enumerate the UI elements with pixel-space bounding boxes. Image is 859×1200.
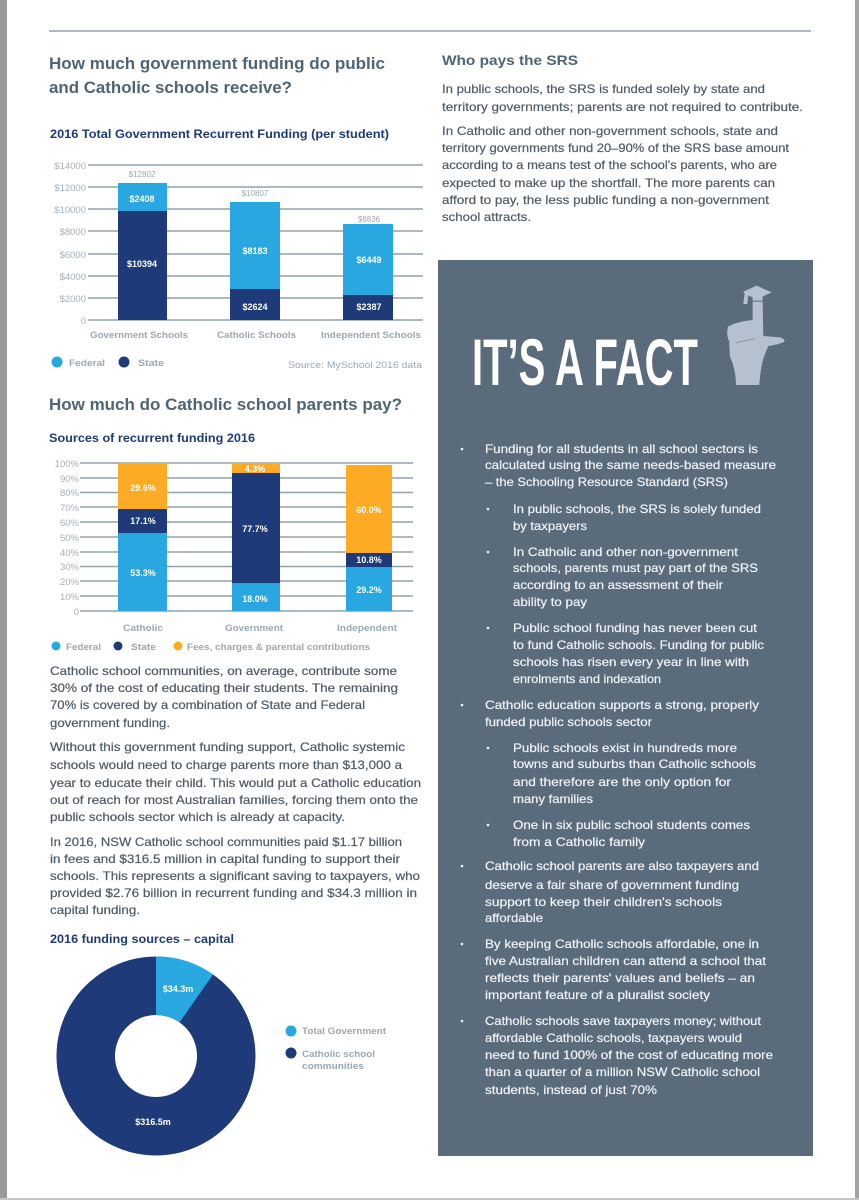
bar: independent schools: $8836: [358, 215, 381, 224]
bullet: supports public sector: funded public schools sector: [485, 715, 652, 729]
bullet: parents are taxpayers: Catholic school parents are also taxpayers and: [485, 859, 759, 873]
bar: catholic: 29.6%: [130, 483, 156, 493]
stacked bar chart: sources of recurrent funding: 30%: [60, 562, 80, 573]
sub-bullet: public schools SRS: by taxpayers: [513, 519, 587, 533]
heading: government funding: [49, 54, 385, 97]
bullet: one in five: By keeping Catholic schools affordable, one in: [485, 937, 759, 951]
text block: public schools SRS: [442, 82, 803, 114]
stacked bar chart: sources of recurrent funding: 100%: [55, 459, 80, 470]
text block: without government funding: schools would need to charge parents more than $13,000 a: [50, 758, 402, 772]
chart title: sources of recurrent funding: Sources of recurrent funding 2016: [49, 431, 255, 445]
donut chart: capital funding: [56, 956, 255, 1156]
text block: without government funding: Without this government funding support, Catholic systemic: [50, 740, 405, 754]
text block: without government funding: public schools sector which is already at capacity.: [50, 810, 345, 824]
stacked bar chart: sources of recurrent funding: 20%: [60, 577, 80, 588]
text block: public schools SRS: In public schools, the SRS is funded solely by state and: [442, 82, 765, 96]
text block: non-government schools SRS: expected to make up the shortfall. The more parents can: [442, 176, 775, 190]
sub-bullet: parents pay part: In Catholic and other non-government: [513, 545, 739, 559]
stacked bar chart: sources of recurrent funding: [55, 459, 413, 634]
text block: non-government schools SRS: [442, 124, 790, 224]
bullet: needs-based funding: [461, 442, 776, 489]
legend: sources of recurrent funding: State: [131, 642, 156, 653]
text block: NSW 2016 figures: [50, 835, 420, 917]
sub-bullet: public school reach: and therefore are the only option for: [513, 775, 731, 789]
heading: parents pay: How much do Catholic school parents pay?: [49, 395, 402, 414]
bar chart: funding per student: $6000: [60, 250, 86, 261]
bar: government schools: $12802: [129, 170, 156, 179]
bar: government: 4.3%: [245, 464, 265, 474]
text block: non-government schools SRS: school attracts.: [442, 210, 531, 224]
sub-bullet: parents pay part: ability to pay: [513, 595, 587, 609]
text block: without government funding: out of reach for most Australian families, forcing them onto the: [50, 793, 418, 807]
heading: government funding: How much government funding do public: [49, 54, 385, 73]
bar: catholic: 17.1%: [130, 516, 156, 526]
stacked bar chart: sources of recurrent funding: Catholic: [123, 623, 163, 634]
stacked bar chart: sources of recurrent funding: 60%: [60, 518, 80, 529]
bullet: parents are taxpayers: support to keep their children's schools: [485, 895, 722, 909]
bar chart: funding per student: Catholic Schools: [217, 330, 296, 341]
bullet: parents are taxpayers: deserve a fair share of government funding: [485, 878, 739, 892]
bullet: one in five: five Australian children can attend a school that: [485, 954, 767, 968]
panel: it's a fact: [438, 260, 813, 1156]
bullet: saves taxpayers money: students, instead of just 70%: [485, 1083, 657, 1097]
text block: NSW 2016 figures: In 2016, NSW Catholic school communities paid $1.17 billion: [50, 835, 402, 849]
bar: independent: 10.8%: [356, 555, 382, 565]
bar: catholic: [118, 463, 167, 611]
bar: catholic schools: $8183: [242, 246, 268, 256]
bullet: supports public sector: [461, 698, 759, 729]
bar chart: funding per student: $8000: [60, 227, 86, 238]
sub-bullet: one in six: One in six public school students comes: [513, 818, 750, 832]
sub-bullet: public school reach: [487, 741, 756, 806]
bar: catholic schools: $10807: [242, 189, 269, 198]
bar chart: funding per student: 0: [81, 316, 86, 327]
bar: independent: 60.0%: [356, 505, 382, 515]
stacked bar chart: sources of recurrent funding: 10%: [60, 592, 80, 603]
sub-bullet: public school funding: [487, 621, 764, 686]
donut chart: capital funding: $34.3m: [163, 984, 193, 994]
stacked bar chart: sources of recurrent funding: 50%: [60, 533, 80, 544]
text block: parent contribution: 70% is covered by a combination of State and Federal: [50, 698, 365, 712]
stacked bar chart: sources of recurrent funding: Independent: [337, 623, 398, 634]
text block: NSW 2016 figures: in fees and $316.5 million in capital funding to support their: [50, 852, 400, 866]
bullet: needs-based funding: – the Schooling Resource Standard (SRS): [485, 475, 728, 489]
chart title: total government recurrent funding: 2016 Total Government Recurrent Funding (per student): [50, 127, 389, 141]
bar: catholic schools: $2624: [242, 302, 268, 312]
sub-bullet: public school funding: Public school funding has never been cut: [513, 621, 758, 635]
text block: public schools SRS: territory governments; parents are not required to contribute.: [442, 100, 803, 114]
bullet: saves taxpayers money: need to fund 100% of the cost of educating more: [485, 1048, 773, 1062]
text block: NSW 2016 figures: provided $2.76 billion in recurrent funding and $34.3 million in: [50, 886, 417, 900]
legend: sources of recurrent funding: [52, 642, 370, 653]
bar chart: funding per student: $12000: [54, 183, 86, 194]
bullet: needs-based funding: Funding for all students in all school sectors is: [485, 442, 758, 456]
chart title: capital funding sources: 2016 funding sources – capital: [50, 932, 234, 946]
bar: government schools: [118, 170, 167, 320]
heading: government funding: and Catholic schools receive?: [49, 78, 292, 97]
bar chart: funding per student: $10000: [54, 205, 86, 216]
bar: government: 77.7%: [242, 524, 268, 534]
legend: funding per student: [52, 356, 164, 369]
text block: parent contribution: [50, 664, 398, 730]
bar chart: funding per student: $14000: [54, 161, 86, 172]
bar: catholic: 53.3%: [130, 568, 156, 578]
text block: NSW 2016 figures: schools. This represents a significant saving to taxpayers, who: [50, 869, 420, 883]
legend: sources of recurrent funding: Fees, charges & parental contributions: [187, 642, 370, 653]
text block: without government funding: [50, 740, 421, 824]
bar: independent schools: [343, 215, 393, 320]
legend: funding per student: Federal: [69, 358, 105, 369]
heading: who pays the SRS: Who pays the SRS: [442, 52, 578, 68]
legend: capital funding: [286, 1026, 387, 1072]
sub-bullet: parents pay part: schools, parents must pay part of the SRS: [513, 561, 758, 575]
text block: non-government schools SRS: according to a means test of the school's parents, who are: [442, 158, 777, 172]
sub-bullet: one in six: from a Catholic family: [513, 835, 645, 849]
sub-bullet: public schools SRS: [487, 502, 761, 533]
stacked bar chart: sources of recurrent funding: 0: [74, 607, 79, 618]
bullet: saves taxpayers money: [461, 1014, 773, 1097]
bullet: parents are taxpayers: affordable: [485, 911, 543, 925]
sub-bullet: one in six: [487, 818, 750, 849]
bar chart: funding per student: Government Schools: [90, 330, 188, 341]
sub-bullet: public school funding: schools has risen every year in line with: [513, 655, 749, 669]
bar: independent: [346, 465, 392, 611]
icon: hand with graduation cap: [727, 286, 784, 385]
bar: catholic schools: [230, 189, 280, 320]
bar: government schools: $10394: [127, 259, 157, 269]
bar: government: 18.0%: [242, 594, 268, 604]
stacked bar chart: sources of recurrent funding: 90%: [60, 474, 80, 485]
bar: independent: 29.2%: [356, 585, 382, 595]
donut chart: capital funding: $316.5m: [135, 1117, 171, 1127]
text block: without government funding: year to educate their child. This would put a Catholic education: [50, 776, 421, 790]
bullet: saves taxpayers money: affordable Catholic schools, taxpayers would: [485, 1031, 742, 1045]
panel title: IT’S A FACT: [472, 325, 698, 399]
bullet: one in five: important feature of a pluralist society: [485, 988, 710, 1002]
bullet: saves taxpayers money: than a quarter of a million NSW Catholic school: [485, 1065, 760, 1079]
legend: capital funding: Total Government: [302, 1026, 387, 1037]
bar chart: funding per student: $4000: [60, 272, 86, 283]
bullet: one in five: [461, 937, 767, 1002]
bar chart: funding per student: $2000: [60, 294, 86, 305]
bar chart: funding per student: Independent Schools: [321, 330, 421, 341]
sub-bullet: parents pay part: [487, 545, 758, 609]
text block: parent contribution: Catholic school communities, on average, contribute some: [50, 664, 397, 678]
sub-bullet: public school reach: many families: [513, 792, 593, 806]
stacked bar chart: sources of recurrent funding: 40%: [60, 548, 80, 559]
bar chart: funding per student: [54, 161, 423, 341]
stacked bar chart: sources of recurrent funding: Government: [225, 623, 284, 634]
text block: non-government schools SRS: In Catholic and other non-government schools, state and: [442, 124, 778, 138]
text block: NSW 2016 figures: capital funding.: [50, 903, 140, 917]
bar: independent schools: $6449: [356, 255, 382, 265]
text block: parent contribution: government funding.: [50, 716, 170, 730]
source note: Source: MySchool 2016 data: [288, 360, 423, 371]
legend: capital funding: Catholic school: [302, 1049, 375, 1060]
stacked bar chart: sources of recurrent funding: 80%: [60, 488, 80, 499]
sub-bullet: public school funding: to fund Catholic schools. Funding for public: [513, 638, 764, 652]
bullet: supports public sector: Catholic education supports a strong, properly: [485, 698, 759, 712]
bar: government: [232, 463, 280, 611]
text block: non-government schools SRS: territory governments fund 20–90% of the SRS base amount: [442, 141, 790, 155]
bullet: saves taxpayers money: Catholic schools save taxpayers money; without: [485, 1014, 762, 1028]
bar: government schools: $2408: [129, 194, 155, 204]
sub-bullet: public school reach: towns and suburbs than Catholic schools: [513, 757, 756, 771]
bullet: one in five: reflects their parents' values and beliefs – an: [485, 971, 755, 985]
bar: independent schools: $2387: [356, 302, 382, 312]
stacked bar chart: sources of recurrent funding: 70%: [60, 503, 80, 514]
bullet: needs-based funding: calculated using the same needs-based measure: [485, 458, 776, 472]
sub-bullet: public schools SRS: In public schools, the SRS is solely funded: [513, 502, 761, 516]
sub-bullet: parents pay part: according to an assessment of their: [513, 578, 723, 592]
text block: non-government schools SRS: afford to pay, the less public funding a non-government: [442, 193, 770, 207]
bullet: parents are taxpayers: [461, 859, 759, 925]
sub-bullet: public school reach: Public schools exist in hundreds more: [513, 741, 737, 755]
text block: parent contribution: 30% of the cost of educating their students. The remaining: [50, 681, 398, 695]
sub-bullet: public school funding: enrolments and indexation: [513, 672, 661, 686]
legend: capital funding: communities: [302, 1061, 364, 1072]
legend: sources of recurrent funding: Federal: [66, 642, 101, 653]
legend: funding per student: State: [138, 358, 164, 369]
